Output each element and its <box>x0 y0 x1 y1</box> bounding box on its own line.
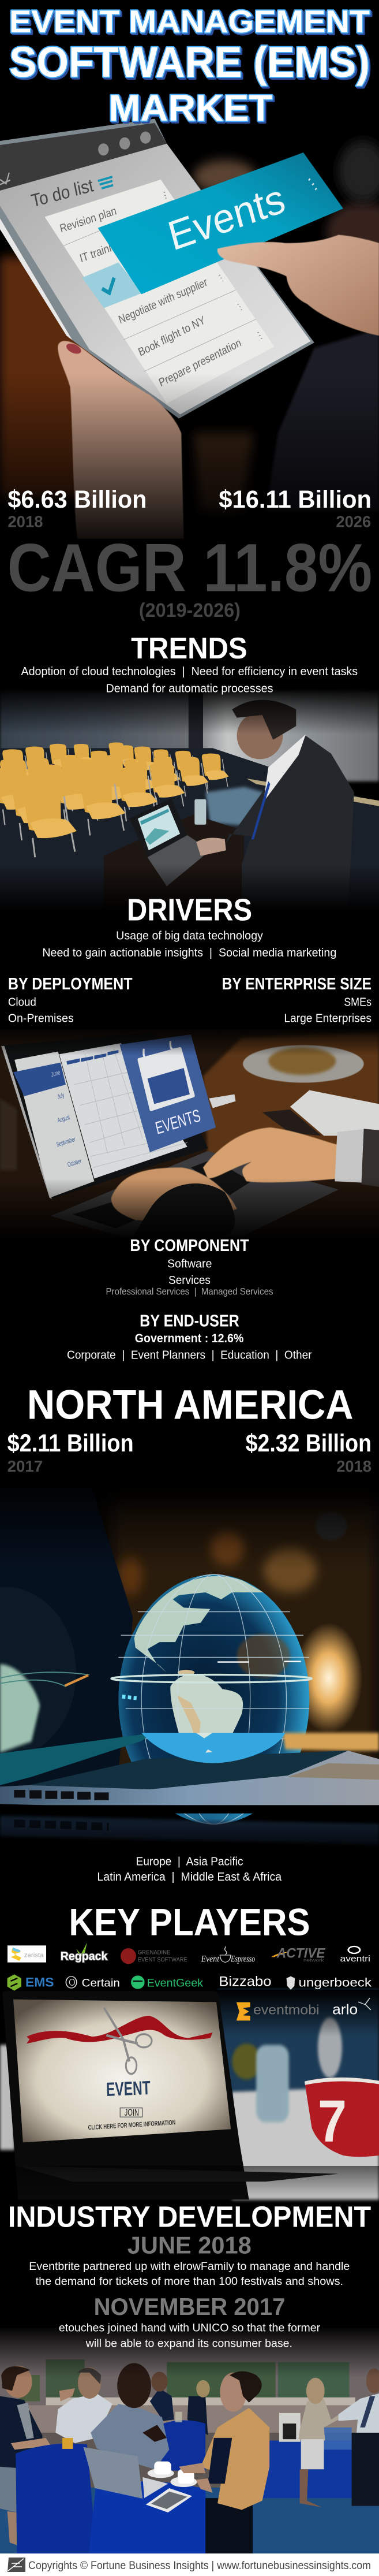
november 2017: etouches joined hand with UNICO so that the former <box>59 2321 320 2334</box>
panel: industry development <box>8 2201 371 2349</box>
events card <box>119 1034 216 1152</box>
panel: by component: BY COMPONENT <box>130 1236 249 1255</box>
panel: by enterprise size: Large Enterprises <box>284 1012 372 1025</box>
scissors <box>104 2008 152 2074</box>
photo: glass globe on laptop <box>0 1476 379 1824</box>
november 2017: will be able to expand its consumer base. <box>85 2337 292 2349</box>
title: SOFTWARE (EMS) <box>9 38 370 86</box>
blurred bokeh background <box>109 1498 379 1797</box>
north america heading: NORTH AMERICA <box>27 1382 354 1428</box>
market size stats <box>7 485 372 621</box>
red mug <box>305 2078 379 2157</box>
key player logos <box>7 1942 372 2020</box>
logo: grenadine: EVENT SOFTWARE <box>138 1957 187 1963</box>
logo: active network: network <box>303 1958 324 1963</box>
small reflected globe <box>0 1587 88 1758</box>
laptop and tablet <box>84 2447 192 2512</box>
person: man in white shirt <box>55 2367 112 2443</box>
panel: trends: Demand for automatic processes <box>106 683 273 695</box>
back table <box>260 2440 355 2498</box>
logo: eventmobi: eventmobi <box>253 2003 320 2017</box>
logo: ems <box>7 1974 54 1991</box>
grid lines <box>118 1574 309 1824</box>
month labels: September <box>56 1136 76 1149</box>
event laptop <box>2 1991 249 2199</box>
events card: EVENTS <box>153 1106 202 1138</box>
photo: networking event with blue tables <box>0 2166 379 2553</box>
typing hands <box>111 1127 379 1237</box>
logo: event espresso <box>201 1946 255 1964</box>
logo: eventgeek <box>131 1975 203 1989</box>
logo: grenadine <box>121 1948 187 1964</box>
month labels: July <box>57 1092 65 1101</box>
2026 value: $16.11 Billion <box>219 485 372 513</box>
panel: by end-user: Government : 12.6% <box>135 1332 244 1345</box>
logo: aventri: aventri <box>340 1954 370 1964</box>
drivers list: Usage of big data technology <box>116 929 263 943</box>
panel: by component: Services <box>168 1274 211 1287</box>
ribbon <box>27 2016 213 2043</box>
logo: zerista <box>7 1945 46 1963</box>
title: MARKET <box>108 87 272 129</box>
logo: eventmobi <box>237 2002 320 2020</box>
laptop <box>1 1032 339 1237</box>
logo: ems: EMS <box>25 1975 54 1990</box>
red mug: 7 <box>318 2088 347 2154</box>
ports <box>14 1790 109 1800</box>
pointing hand <box>217 235 379 336</box>
2018 label: 2018 <box>7 512 43 531</box>
month labels: October <box>67 1157 82 1168</box>
middle table <box>161 2412 205 2471</box>
logo: certain <box>66 1976 120 1989</box>
section heading: INDUSTRY DEVELOPMENT <box>8 2201 371 2233</box>
forecast period: (2019-2026) <box>139 599 241 621</box>
logo: certain: Certain <box>82 1976 120 1989</box>
plate <box>243 1045 364 1083</box>
photo: hands on tablet with events panel <box>0 119 379 553</box>
room <box>0 2328 379 2553</box>
june 2018: the demand for tickets of more than 100 festivals and shows. <box>36 2275 343 2287</box>
events panel: Events <box>163 176 290 260</box>
left table <box>16 2438 97 2553</box>
CAGR: CAGR 11.8% <box>7 529 372 606</box>
panel: by deployment: On-Premises <box>8 1012 74 1025</box>
panel: regions <box>97 1856 282 1883</box>
logo: bizzabo: Bizzabo <box>219 1973 272 1989</box>
man <box>196 700 354 909</box>
photo: speaker in auditorium with yellow chairs <box>0 687 379 911</box>
task rows: Prepare presentation <box>157 337 243 390</box>
top fade <box>0 1476 379 1570</box>
panel: regions: Latin America | Middle East & Africa <box>97 1871 282 1883</box>
blurred background tones <box>0 141 379 511</box>
logo: arlo <box>332 1998 371 2018</box>
month labels: August <box>57 1114 70 1125</box>
logo: event espresso: Espresso <box>230 1954 255 1964</box>
front table <box>89 2481 208 2553</box>
panel: key players: KEY PLAYERS <box>69 1901 310 1944</box>
panel: by component <box>106 1236 273 1297</box>
south america <box>170 1674 243 1794</box>
november 2017: NOVEMBER 2017 <box>94 2294 285 2320</box>
2026 label: 2026 <box>336 512 371 531</box>
panel: north america <box>7 1382 372 1475</box>
panel: by enterprise size: SMEs <box>344 996 372 1009</box>
photo: laptop with events calendar <box>0 1025 379 1241</box>
tablet <box>0 119 343 419</box>
holding hand <box>58 341 183 539</box>
event laptop: JOIN <box>125 2108 139 2118</box>
photo: event laptop with ribbon and red mug <box>0 1990 379 2199</box>
panel: by component: Professional Services | Managed Services <box>106 1287 273 1297</box>
coffee machine <box>279 2413 352 2450</box>
person: navy suit man and blonde woman <box>150 2372 210 2435</box>
panel: by component: Software <box>167 1258 212 1271</box>
logo: ungerboeck: ungerboeck <box>298 1976 372 1990</box>
2017 value: $2.11 Billion <box>7 1429 134 1457</box>
logo: grenadine: GRENADINE <box>138 1950 171 1956</box>
june 2018: Eventbrite partnered up with elrowFamily to manage and handle <box>29 2259 350 2272</box>
panel: by deployment: Cloud <box>8 996 36 1009</box>
person: man right <box>339 2368 379 2506</box>
title: EVENT MANAGEMENT <box>9 3 370 39</box>
month labels <box>50 1069 82 1168</box>
drivers heading: DRIVERS <box>127 892 252 927</box>
event laptop: EVENT <box>106 2077 151 2100</box>
trends list: Adoption of cloud technologies | Need for efficiency in event tasks <box>21 665 358 678</box>
person: central man <box>91 2363 169 2469</box>
panel: by enterprise size <box>222 974 372 1025</box>
task rows: Revision plan <box>58 204 118 236</box>
globe <box>111 1574 312 1824</box>
event laptop: CLICK HERE FOR MORE INFORMATION <box>88 2119 176 2132</box>
dark laptop screen <box>0 1487 133 1797</box>
person: blonde woman right <box>298 2378 343 2507</box>
logo: zerista: zerista <box>24 1952 44 1959</box>
june 2018 <box>29 2232 350 2287</box>
logo: regpack <box>61 1942 108 1963</box>
events panel <box>98 152 343 294</box>
november 2017 <box>59 2294 320 2349</box>
trends heading: TRENDS <box>131 632 247 665</box>
task rows: Negotiate with supplier <box>117 276 209 327</box>
2018 label: 2018 <box>336 1457 372 1475</box>
panel: by deployment: BY DEPLOYMENT <box>8 974 133 993</box>
panel: trends <box>21 632 358 695</box>
north america <box>134 1576 264 1673</box>
task rows <box>45 180 275 403</box>
task rows: IT traini <box>78 241 113 265</box>
panel: drivers <box>42 892 336 959</box>
photo: laptop under globe <box>0 1733 379 1857</box>
month labels: June <box>50 1069 61 1079</box>
coffee cups <box>148 2462 197 2487</box>
person: woman in tan blazer <box>179 2371 269 2553</box>
panel: by end-user: BY END-USER <box>140 1312 239 1330</box>
logo: eventgeek: EventGeek <box>147 1976 203 1989</box>
table and laptop <box>104 798 244 909</box>
panel: by end-user <box>67 1312 312 1362</box>
chairs <box>0 742 228 857</box>
task rows: Book flight to NY <box>137 314 207 359</box>
top fade <box>0 687 379 734</box>
logo: active network: ACTIVE <box>276 1945 325 1961</box>
2018 value: $2.32 Billion <box>246 1429 372 1457</box>
june 2018: JUNE 2018 <box>127 2232 252 2259</box>
logo: arlo: arlo <box>332 2002 358 2018</box>
footer bar <box>0 2553 379 2576</box>
panel: by deployment <box>8 974 133 1025</box>
person: left woman <box>0 2365 51 2545</box>
2017 label: 2017 <box>7 1457 43 1475</box>
footer logo <box>7 2558 25 2572</box>
to do list heading: To do list <box>29 175 96 211</box>
2018 value: $6.63 Billion <box>7 485 147 513</box>
panel: drivers: Need to gain actionable insights | Social media marketing <box>42 947 336 959</box>
logo: regpack: Regpack <box>61 1949 108 1963</box>
logo: aventri <box>340 1946 370 1964</box>
panel: regions: Europe | Asia Pacific <box>136 1856 243 1868</box>
title <box>9 3 370 129</box>
notebook <box>262 1110 321 1136</box>
panel: by end-user: Corporate | Event Planners | Education | Other <box>67 1349 312 1362</box>
logo: active network <box>271 1945 325 1963</box>
panel: by enterprise size: BY ENTERPRISE SIZE <box>222 974 372 993</box>
logo: event espresso: Event <box>201 1954 220 1964</box>
